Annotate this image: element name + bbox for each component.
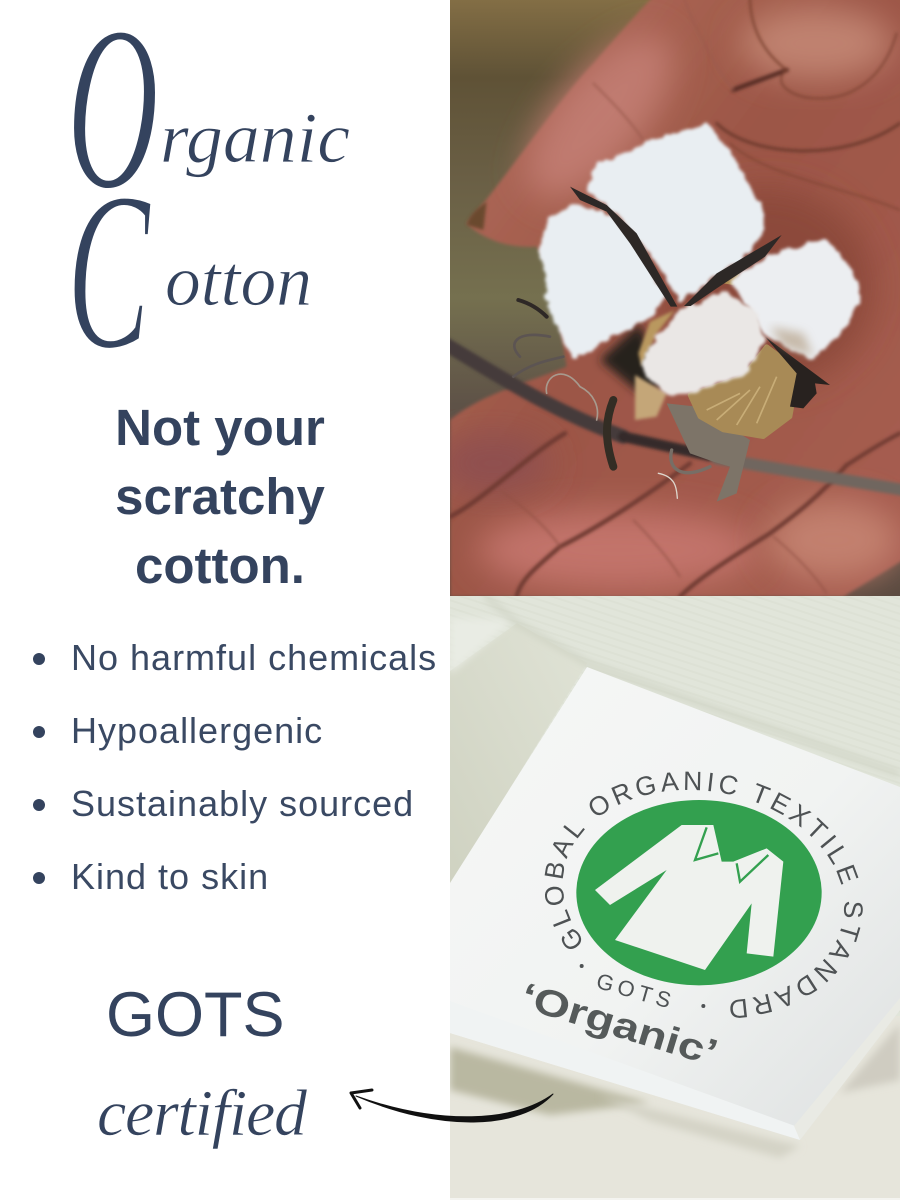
label tag — [450, 667, 900, 1140]
palm creases — [593, 0, 900, 210]
text: certified: certified — [97, 1077, 308, 1150]
hand shape — [437, 0, 900, 597]
heading: Not your scratchy cotton — [115, 399, 325, 594]
fabric background — [450, 596, 900, 1200]
heading: Not your scratchy cotton: cotton. — [135, 537, 305, 594]
heading: Not your scratchy cotton: scratchy — [115, 468, 325, 525]
GOTS small text: GOTS — [594, 968, 678, 1014]
finger gaps — [450, 433, 900, 597]
arrow pointing to label — [350, 1088, 554, 1122]
text: GOTS: GOTS — [106, 980, 285, 1050]
label tag: GLOBAL ORGANIC TEXTILE STANDARD — [544, 772, 863, 1018]
Organic text: ‘Organic’ — [516, 974, 723, 1074]
boll base and stem — [600, 254, 830, 502]
bullet: Kind to skin: Kind to skin — [71, 856, 269, 897]
photo: GOTS organic label — [450, 596, 900, 1200]
shirt icon — [595, 825, 783, 970]
bullet list — [33, 637, 437, 897]
heading: Not your scratchy cotton: Not your — [115, 399, 325, 456]
photo: cotton boll in hand — [450, 0, 900, 596]
title word rganic: rganic — [160, 98, 350, 178]
GOTS logo green circle — [576, 800, 822, 985]
bullet: Sustainably sourced: Sustainably sourced — [71, 783, 414, 824]
cotton locks — [543, 127, 857, 392]
dark bracts — [570, 187, 782, 307]
title: Organic Cotton — [67, 0, 350, 370]
branch — [447, 345, 900, 490]
bullet: No harmful chemicals: No harmful chemicals — [71, 637, 437, 678]
title word otton: otton — [165, 241, 312, 321]
bullet: Hypoallergenic: Hypoallergenic — [71, 710, 323, 751]
dried fibres — [513, 300, 710, 498]
ring text — [563, 790, 844, 1001]
